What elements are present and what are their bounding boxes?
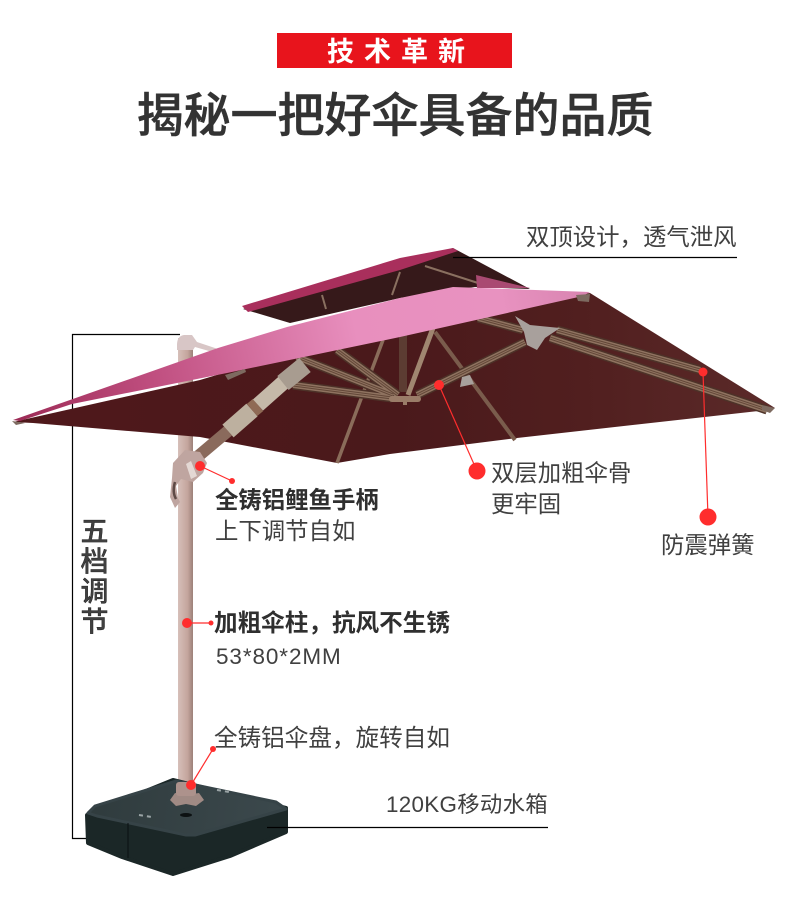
label: 加粗伞柱: [214, 609, 450, 669]
rib bracket: [515, 316, 560, 350]
label: 防震弹簧: 防震弹簧: [661, 532, 755, 558]
upper canopy: [242, 248, 530, 323]
main canopy top: [13, 287, 590, 421]
label: 双层加粗伞骨: 双层加粗伞骨: [491, 460, 631, 486]
label: 全铸铝鲤鱼手柄: 全铸铝鲤鱼手柄: [215, 487, 379, 513]
marker: 伞盘: [186, 746, 216, 790]
label: 五档调节: 档: [80, 546, 109, 577]
canopy tips: [12, 294, 775, 425]
height bracket line: [72, 334, 180, 838]
red banner: 技术革新: [327, 37, 475, 67]
umbrella pole: [177, 335, 218, 788]
leader line: 水箱: [267, 826, 548, 828]
label: 全铸铝鲤鱼手柄: 上下调节自如: [215, 518, 355, 544]
umbrella ribs: [293, 318, 767, 463]
central post: [399, 335, 407, 392]
label: 双层加粗伞骨: 更牢固: [491, 491, 561, 517]
label: 五档调节: 五: [80, 516, 109, 547]
water tank base: [87, 780, 286, 874]
marker: 伞柱: [182, 618, 214, 628]
carp handle: [170, 450, 207, 508]
marker: 手柄: [195, 461, 235, 484]
cantilever arm: [196, 365, 305, 458]
marker: 双层加粗伞骨: [434, 380, 486, 480]
label: 双顶设计: 双顶设计，透气泄风: [526, 224, 737, 250]
label: 五档调节: [80, 516, 109, 637]
label: 五档调节: 节: [80, 606, 109, 637]
marker: 防震弹簧: [698, 368, 716, 526]
title: 揭秘一把好伞具备的品质: [136, 89, 654, 142]
label: 全铸铝伞盘: 全铸铝伞盘，旋转自如: [214, 725, 450, 752]
small rib bracket: [460, 375, 474, 387]
label: 120KG移动水箱: 120KG移动水箱: [386, 792, 548, 817]
label: 五档调节: 调: [80, 576, 109, 607]
red banner: [277, 33, 512, 68]
leader line: 双顶: [453, 256, 737, 258]
label: 加粗伞柱: 加粗伞柱，抗风不生锈: [214, 609, 450, 637]
label: 全铸铝鲤鱼手柄: [215, 487, 379, 544]
main canopy underside: [13, 293, 775, 463]
label: 加粗伞柱: 53*80*2MM: [216, 644, 342, 669]
